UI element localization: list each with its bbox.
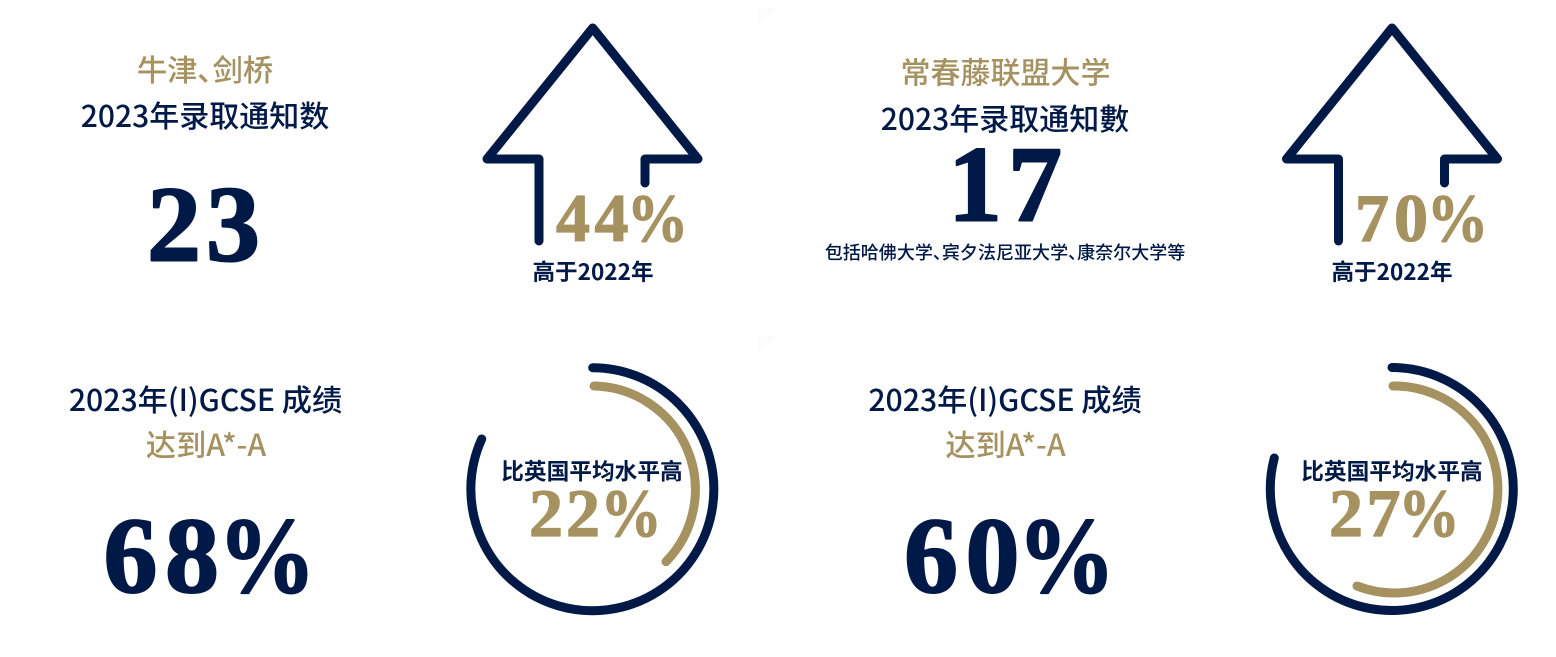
heading: 2023 offers: 2023年录取通知數 bbox=[881, 95, 1129, 139]
caption: above UK average: 比英国平均水平高 bbox=[501, 454, 683, 486]
number: 60%: % bbox=[1018, 497, 1115, 616]
panel: GCSE result 60% bbox=[868, 376, 1142, 616]
caption: higher than 2022: 高于2022年 bbox=[532, 254, 654, 287]
chart: navy ring bbox=[471, 368, 714, 611]
number: 44%: 44 bbox=[556, 180, 628, 256]
number: 22%: % bbox=[600, 475, 662, 551]
chart: navy ring bbox=[1270, 368, 1513, 610]
heading: 2023 GCSE results: 2023年(I)GCSE 成绩 bbox=[69, 376, 342, 420]
caption: higher than 2022: 高于2022年 bbox=[1331, 254, 1453, 287]
heading: reaching A*-A: 达到A*-A bbox=[945, 421, 1066, 465]
heading: Ivy League: 常春藤联盟大学 bbox=[900, 48, 1110, 92]
number: 60%: 60 bbox=[904, 497, 1020, 616]
panel: Ivy League offers bbox=[825, 48, 1185, 265]
panel: Oxbridge increase arrow bbox=[487, 28, 698, 287]
heading: 2023 GCSE results: 2023年(I)GCSE 成绩 bbox=[868, 376, 1142, 420]
number: 70% bbox=[1355, 180, 1488, 256]
panel: GCSE result 68% bbox=[69, 376, 342, 616]
number: 68%: % bbox=[218, 497, 316, 616]
panel: GCSE comparison 22% bbox=[471, 368, 714, 611]
panel: GCSE comparison 27% bbox=[1270, 368, 1513, 610]
panel: Ivy League increase arrow bbox=[1286, 28, 1498, 287]
number: 22%: 22 bbox=[529, 475, 600, 551]
number: 17: 17 bbox=[948, 126, 1062, 244]
number: 68%: 68 bbox=[104, 497, 219, 616]
icon: up arrow bbox=[1286, 28, 1498, 241]
heading: 2023 offers: 2023年录取通知数 bbox=[81, 92, 329, 136]
icon: up arrow bbox=[487, 28, 698, 241]
number: 60% bbox=[904, 497, 1115, 616]
chart: gold ring bbox=[1357, 386, 1498, 593]
number: 70%: % bbox=[1427, 180, 1488, 256]
number: 27%: % bbox=[1398, 475, 1460, 551]
number: 27%: 27 bbox=[1329, 475, 1400, 551]
number: 70%: 70 bbox=[1355, 180, 1428, 256]
number: 23: 23 bbox=[147, 166, 260, 284]
number: 27% bbox=[1329, 475, 1460, 551]
heading: reaching A*-A: 达到A*-A bbox=[146, 421, 266, 465]
number: 68% bbox=[104, 497, 316, 616]
number: 44% bbox=[556, 180, 688, 256]
number: 22% bbox=[529, 475, 662, 551]
caption: above UK average: 比英国平均水平高 bbox=[1301, 454, 1483, 486]
heading: Oxford and Cambridge: 牛津、剑桥 bbox=[137, 46, 273, 90]
chart: gold ring bbox=[594, 386, 695, 562]
panel: Oxbridge offers bbox=[81, 46, 329, 284]
caption: including universities: 包括哈佛大学、宾夕法尼亚大学、康奈尔大学等 bbox=[825, 239, 1185, 265]
number: 44%: % bbox=[627, 180, 688, 256]
